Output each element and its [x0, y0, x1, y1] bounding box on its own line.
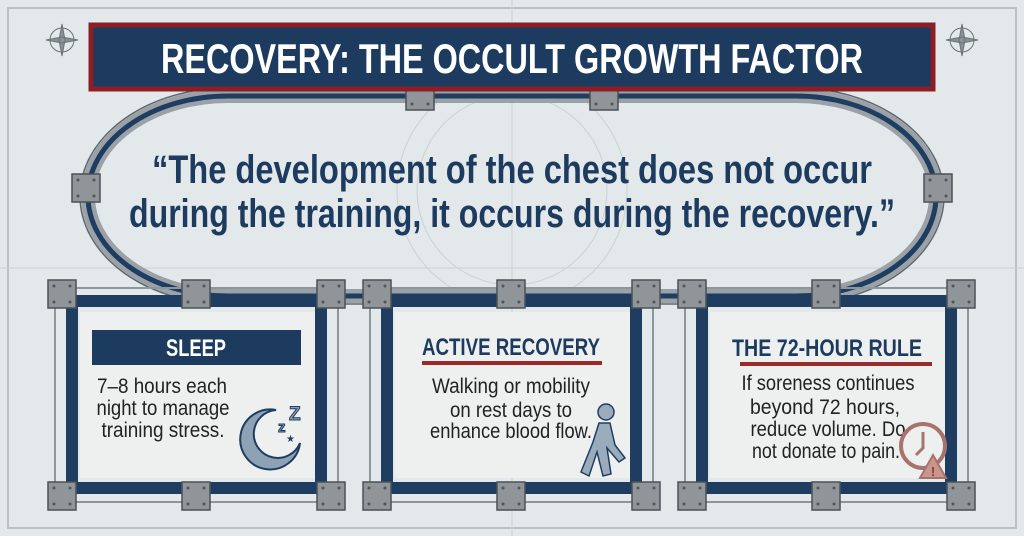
quote: [129, 148, 895, 236]
icon: clock warning: [901, 424, 946, 479]
heading: sleep: SLEEP: [166, 335, 226, 362]
text: 72-hour rule: not donate to pain.: [752, 440, 900, 463]
icon: moon: ★: [286, 434, 295, 445]
icon: walker: [581, 404, 625, 476]
text: 72-hour rule: beyond 72 hours,: [750, 396, 900, 419]
text: sleep: 7–8 hours each: [97, 375, 227, 398]
text: sleep: night to manage: [96, 397, 230, 420]
icon: compass right: [946, 24, 978, 56]
text: active recovery: [430, 375, 592, 443]
quote: “The development of the chest does not occur: [152, 148, 872, 192]
icon: moon: Z: [289, 404, 301, 425]
icon: clock warning: !: [931, 464, 935, 479]
text: 72-hour rule: reduce volume. Do: [750, 418, 906, 441]
text: 72-hour rule: If soreness continues: [742, 372, 914, 395]
text: active recovery: on rest days to: [450, 399, 572, 422]
panel: 72-hour rule: [678, 280, 975, 510]
heading: sleep: [92, 330, 301, 365]
heading: 72-hour rule: THE 72-HOUR RULE: [732, 335, 922, 362]
oval frame: [72, 82, 952, 304]
panel: sleep: [48, 280, 345, 510]
text: active recovery: Walking or mobility: [432, 375, 590, 398]
heading: active recovery: ACTIVE RECOVERY: [422, 334, 600, 361]
icon: compass left: [46, 24, 78, 56]
icon: moon: [240, 404, 301, 469]
icon: moon: z: [278, 419, 286, 436]
text: sleep: [96, 375, 230, 442]
title: [91, 25, 933, 89]
text: 72-hour rule: [742, 372, 914, 463]
panel: active recovery: [363, 280, 660, 510]
text: active recovery: enhance blood flow.: [430, 420, 592, 443]
text: sleep: training stress.: [102, 419, 224, 442]
